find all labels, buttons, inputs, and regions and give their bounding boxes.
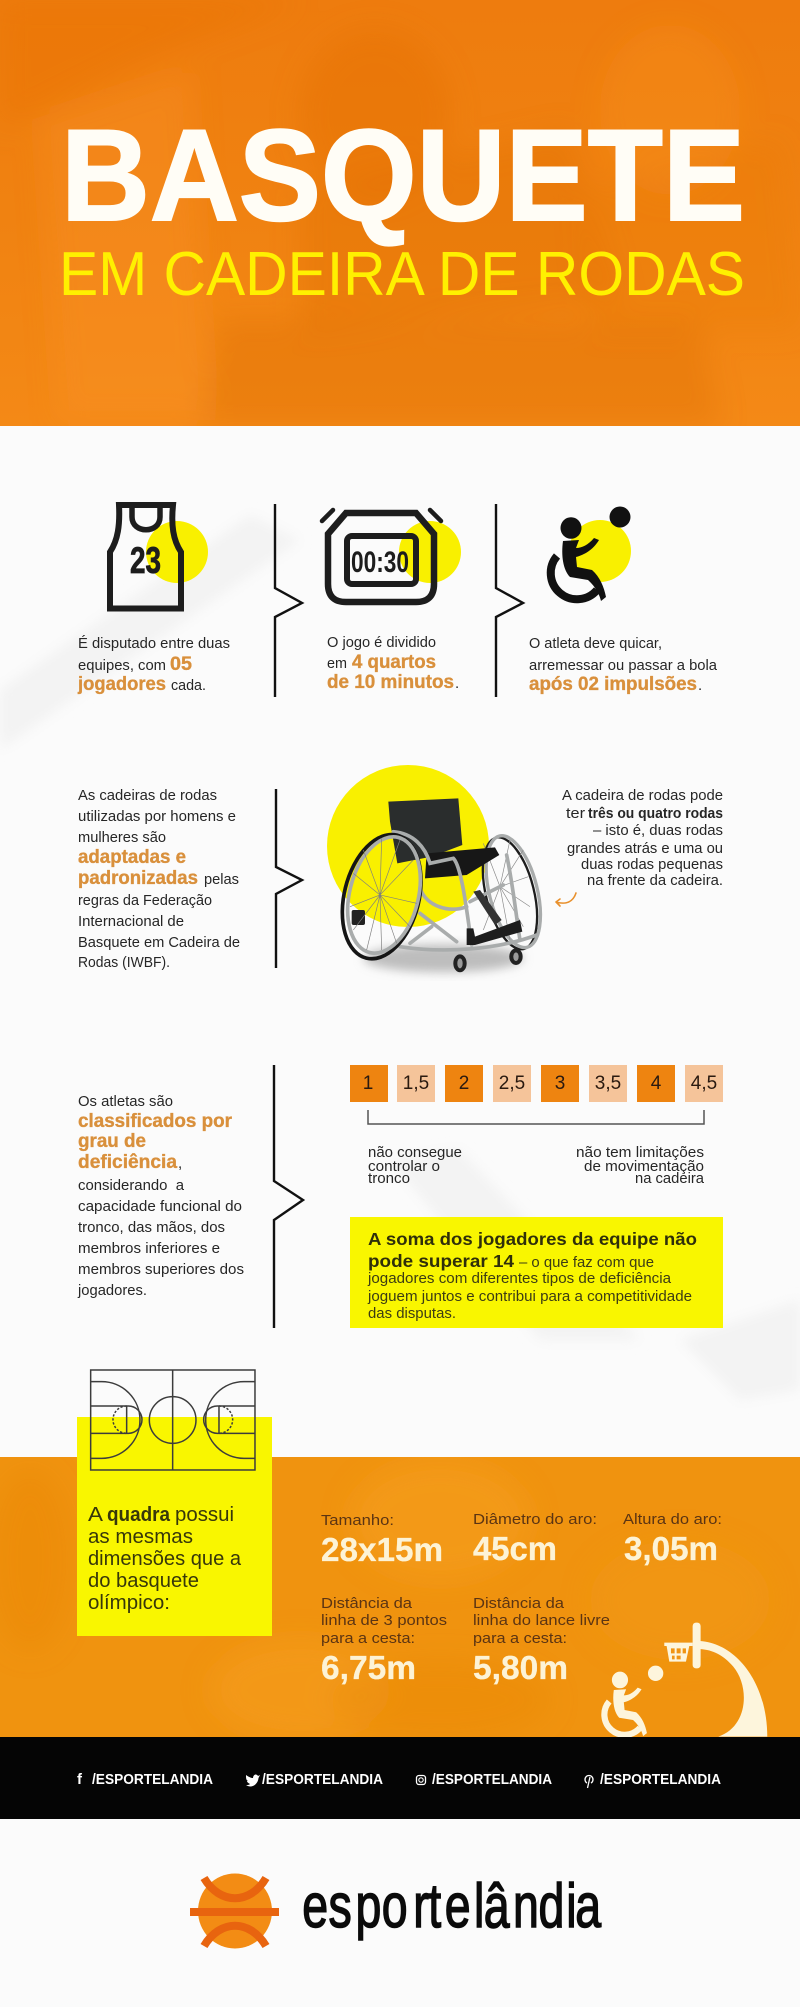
chevron divider 4 [274,1065,303,1328]
chevron divider 3 [276,789,302,968]
stat: three point distance [321,1595,447,1686]
text: classification: grau de [78,1131,146,1152]
icon: jersey: 23 [130,540,161,581]
text: wheel count: ter [566,805,585,822]
callout: sum of points [350,1217,723,1328]
text: court [88,1503,242,1614]
panel: dribble rule [529,506,718,695]
far wheel [473,830,550,955]
text: court: quadra [107,1503,171,1526]
text: wheelchair rules: padronizadas [78,868,198,889]
text: wheel count: – isto é, duas rodas [593,822,723,839]
text: wheelchair rules: pelas [204,871,239,888]
text: classification: jogadores. [77,1282,147,1299]
classification scale [350,1065,723,1102]
text: wheelchair rules: mulheres são [78,829,166,846]
text: players: cada. [171,677,206,694]
classification scale: 1,5 [403,1073,429,1094]
text: court: do basquete [88,1569,199,1592]
text: wheelchair rules: regras da Federação [78,892,212,909]
stat: free throw distance: linha do lance livre [473,1612,610,1629]
text: wheel count: A cadeira de rodas pode [562,787,723,804]
text: classification: membros superiores dos [78,1261,244,1278]
text: court: olímpico: [88,1591,170,1614]
icon: jersey [110,505,208,608]
icon: timer: 00:30 [351,546,409,579]
text: classification: classificados por [78,1111,233,1132]
text: wheelchair rules: adaptadas e [78,847,186,868]
stat: free throw distance: 5,80m [473,1649,568,1686]
court diagram [91,1370,255,1470]
stat: free throw distance: para a cesta: [473,1630,567,1647]
text: wheelchair rules: Basquete em Cadeira de [78,934,240,951]
footer social bar [0,1737,800,1819]
text: classification: tronco, das mãos, dos [78,1219,225,1236]
classification scale: 3,5 [595,1073,621,1094]
classification scale: 2,5 [499,1073,525,1094]
text: wheel count: duas rodas pequenas [581,856,723,873]
text: wheel count: grandes atrás e uma ou [567,840,723,857]
callout: sum of points: – o que faz com que [519,1255,654,1271]
text: court: possui [175,1503,234,1526]
wheelchair illustration [330,798,550,972]
subtitle: EM CADEIRA DE RODAS [59,240,745,309]
callout: sum of points: A soma dos jogadores da equipe não [368,1229,697,1249]
classification scale: 1 [363,1073,373,1094]
classification scale: 4 [651,1073,662,1094]
stat: rim height: Altura do aro: [623,1511,722,1528]
stat: free throw distance [473,1595,610,1686]
arrow: callout pointer [556,893,576,906]
text: wheel count: três ou quatro rodas [588,805,723,822]
yellow circle behind wheelchair [327,765,489,927]
chevron divider 1 [275,504,302,697]
text: court: as mesmas [88,1525,193,1548]
scale label: high: não tem limitações [576,1144,704,1161]
text: wheelchair rules: As cadeiras de rodas [78,787,217,804]
scale label: high: de movimentação [584,1158,704,1175]
callout: sum of points: joguem juntos e contribui para a competitividade [367,1289,692,1305]
scale label: low: tronco [368,1170,410,1187]
facebook handle: f [77,1771,83,1788]
text: wheelchair rules: utilizadas por homens e [78,808,236,825]
stat: rim diameter [473,1511,597,1567]
stat: size [321,1512,443,1568]
logo [190,1870,602,1948]
text: game time: 4 quartos [352,652,436,673]
panel: game time [322,510,461,693]
band photo texture [222,1470,519,1730]
text: players [77,635,230,695]
stat: size: Tamanho: [321,1512,394,1529]
text: classification [77,1093,244,1299]
text: dribble rule: arremessar ou passar a bola [529,657,718,674]
stat: free throw distance: Distância da [473,1595,565,1612]
icon: hoop [648,1623,767,1737]
panel: court band [0,1457,800,1740]
text: wheelchair rules [78,787,240,971]
scale bracket [368,1110,704,1124]
text: game time: em [327,655,347,672]
stat: size: 28x15m [321,1531,443,1568]
instagram handle: /ESPORTELANDIA [432,1772,552,1788]
text: court: A [88,1503,103,1526]
text: wheel count [562,787,723,889]
near wheel [330,826,433,967]
facebook handle: /ESPORTELANDIA [92,1772,213,1788]
classification scale: 4,5 [691,1073,717,1094]
chevron divider 2 [496,504,523,697]
icon: timer [322,510,461,602]
scale label: high [576,1144,705,1187]
title: BASQUETE [61,102,745,248]
text: classification: considerando a [78,1177,185,1194]
icon: athlete with ball [551,506,631,601]
seat [425,847,499,878]
text: court: dimensões que a [88,1547,242,1570]
scale label: high: na cadeira [635,1170,705,1187]
scale label: low [368,1144,462,1187]
text: wheelchair rules: Rodas (IWBF). [78,954,170,971]
stat: rim diameter: 45cm [473,1530,557,1567]
frame [393,832,537,950]
callout: sum of points: das disputas. [368,1306,456,1322]
casters [453,954,467,972]
stat: rim height [623,1511,722,1567]
scale label: low: não consegue [368,1144,462,1161]
text: dribble rule: . [698,677,702,694]
logo wordmark: esportelândia [302,1870,602,1941]
text: game time: . [455,675,459,692]
twitter handle: /ESPORTELANDIA [262,1772,383,1788]
callout: sum of points: jogadores com diferentes tipos de deficiência [367,1271,672,1287]
text: classification: capacidade funcional do [78,1198,242,1215]
text: dribble rule [529,635,718,695]
stat: rim diameter: Diâmetro do aro: [473,1511,597,1528]
text: game time: de 10 minutos [327,672,454,693]
text: dribble rule: O atleta deve quicar, [529,635,662,652]
text: players: É disputado entre duas [78,635,230,652]
text: game time [327,634,459,693]
decorative grey swooshes [0,515,800,1400]
stat: three point distance: 6,75m [321,1649,416,1686]
pinterest handle: /ESPORTELANDIA [600,1772,721,1788]
text: classification: membros inferiores e [78,1240,220,1257]
text: players: equipes, com [78,657,166,674]
text: players: 05 [170,654,192,675]
text: game time: O jogo é dividido [327,634,436,651]
classification scale: 3 [555,1073,565,1094]
footrest [467,920,522,945]
text: dribble rule: após 02 impulsões [529,674,697,695]
text: wheelchair rules: Internacional de [78,913,184,930]
stat: three point distance: linha de 3 pontos [321,1612,447,1629]
court info box [77,1417,272,1636]
stat: rim height: 3,05m [624,1530,718,1567]
logo ball [190,1874,279,1948]
text: classification: deficiência [78,1152,177,1173]
classification scale: 2 [459,1073,469,1094]
stat: three point distance: para a cesta: [321,1630,415,1647]
scale label: low: controlar o [368,1158,440,1175]
text: wheel count: na frente da cadeira. [587,872,723,889]
icon: athlete on court [604,1672,647,1736]
header panel [0,0,800,426]
header photo silhouettes [56,94,701,416]
stat: three point distance: Distância da [321,1595,413,1612]
backrest [388,798,462,863]
text: players: jogadores [77,674,166,695]
panel: players [77,505,230,695]
text: classification: , [178,1155,182,1172]
callout: sum of points: pode superar 14 [368,1251,514,1271]
text: classification: Os atletas são [78,1093,173,1110]
